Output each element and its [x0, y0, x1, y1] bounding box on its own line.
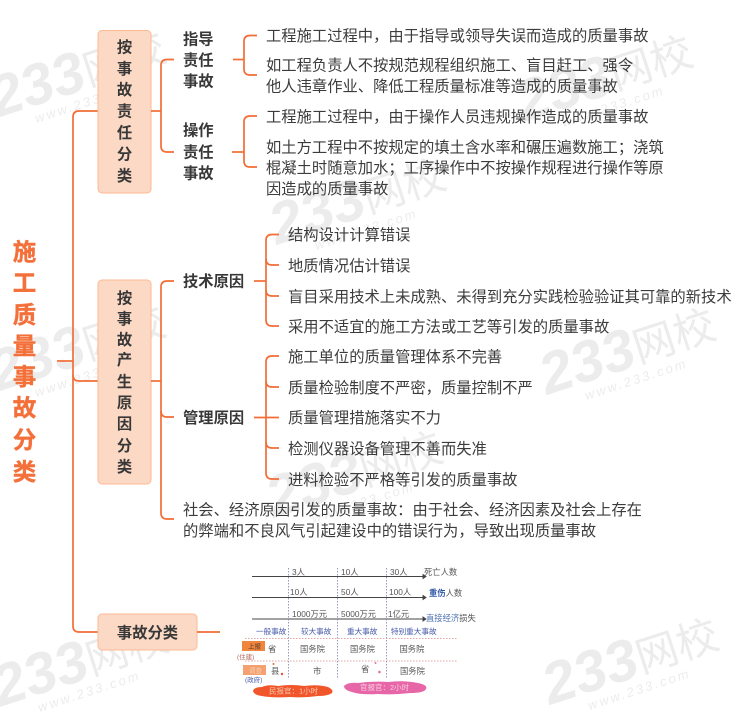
chart: accident grading table: (住建) — [237, 652, 254, 661]
threshold values: 1000万元 — [292, 609, 327, 619]
text block: technical causes — [288, 226, 732, 336]
connector: to chart — [197, 631, 220, 633]
text block: management causes: 检测仪器设备管理不善而失准 — [288, 441, 487, 458]
panel: 按事故责任分类: 按 — [117, 38, 132, 56]
panel: 按事故产生原因分类 — [98, 280, 151, 484]
title: 施工质量事故分类: 工 — [13, 270, 36, 296]
label: 指导责任事故: 事故 — [183, 72, 214, 90]
text block: social and economic causes: 社会、经济原因引发的质量事故：由于社会、经济因素及社会上存在 — [183, 502, 642, 519]
label: 操作责任事故: 事故 — [183, 164, 214, 182]
threshold values: 死亡人数 — [424, 567, 458, 577]
panel: 按事故产生原因分类: 故 — [117, 332, 132, 349]
cloud: 1 hour: 民报官：1小时 — [269, 686, 319, 696]
threshold values: 30人 — [390, 567, 408, 577]
panel: 按事故产生原因分类: 类 — [117, 459, 132, 476]
panel: 按事故产生原因分类: 产 — [117, 352, 132, 369]
chart: accident grading table: 上报 — [248, 642, 262, 650]
threshold values: 直接经济损失 — [426, 613, 477, 623]
panel: 事故分类: 事故分类 — [117, 624, 178, 642]
cloud: 2 hours: 官报官：2小时 — [360, 682, 410, 692]
connector: cause branches — [151, 234, 279, 519]
threshold values: 50人 — [341, 587, 359, 597]
text block: social and economic causes: 的弊端和不良风气引起建设中的错误行为，导致出现质量事故 — [183, 523, 596, 540]
threshold values: 重伤人数 — [429, 588, 463, 598]
title: 施工质量事故分类: 事 — [13, 364, 36, 390]
text block: responsibility details: 棍凝土时随意加水；工序操作中不按操作规程进行操作等原 — [266, 159, 664, 177]
panel: 按事故产生原因分类: 事 — [117, 310, 132, 328]
threshold values: 10人 — [290, 587, 308, 597]
chart: accident grading table: 国务院 — [400, 644, 425, 654]
panel: 按事故责任分类: 类 — [117, 168, 132, 185]
title: 施工质量事故分类: 分 — [13, 427, 36, 453]
text block: responsibility details: 因造成的质量事故 — [266, 181, 388, 198]
label: 操作责任事故: 操作 — [183, 122, 214, 140]
text block: technical causes: 结构设计计算错误 — [288, 226, 410, 244]
panel: 按事故责任分类: 事 — [117, 60, 132, 78]
chart: accident grading table: 国务院 — [400, 666, 426, 676]
threshold values: 10人 — [341, 567, 359, 577]
text block: responsibility details: 工程施工过程中，由于操作人员违规操作造成的质量事故 — [266, 109, 648, 126]
threshold values: 1亿元 — [388, 609, 409, 619]
chart: accident grading table: 国务院 — [300, 644, 326, 654]
text block: responsibility details: 如工程负责人不按规范规程组织施工、盲目赶工、强令 — [266, 58, 633, 74]
label: 管理原因: 管理原因 — [183, 409, 244, 427]
text block: management causes: 质量检验制度不严密，质量控制不严 — [288, 380, 533, 397]
chart: accident grading table: 国务院 — [350, 644, 376, 654]
title: 施工质量事故分类: 量 — [13, 333, 36, 359]
chart: accident grading table: 调查 — [249, 666, 262, 674]
panel: 按事故产生原因分类: 原 — [117, 395, 132, 412]
panel: 按事故责任分类: 任 — [117, 125, 132, 142]
threshold values — [290, 567, 477, 623]
threshold values: 5000万元 — [341, 609, 376, 619]
text block: management causes: 进料检验不严格等引发的质量事故 — [288, 471, 517, 489]
label: 操作责任事故: 责任 — [183, 144, 214, 162]
connector: responsibility branches — [151, 36, 257, 167]
grade names: 重大事故 — [347, 626, 378, 636]
text block: management causes: 施工单位的质量管理体系不完善 — [288, 349, 502, 366]
title: 施工质量事故分类: 质 — [13, 302, 36, 328]
panel: 按事故产生原因分类: 分 — [117, 438, 132, 455]
cloud: 1 hour — [253, 685, 332, 697]
threshold values: 3人 — [292, 567, 305, 577]
trunk connector lines — [57, 111, 98, 632]
report and investigate rows — [242, 641, 265, 651]
panel: 按事故责任分类: 故 — [117, 82, 132, 99]
text block: responsibility details: 他人违章作业、降低工程质量标准等造成的质量事故 — [266, 78, 618, 96]
panel: 按事故产生原因分类: 因 — [117, 416, 132, 433]
panel: 按事故产生原因分类: 生 — [117, 374, 132, 391]
grade names: 较大事故 — [301, 626, 332, 636]
text block: social and economic causes — [183, 502, 642, 540]
panel: 按事故责任分类: 责 — [117, 104, 132, 120]
grade dividers — [288, 568, 386, 678]
label: 操作责任事故 — [183, 122, 214, 182]
grade names: 一般事故 — [256, 626, 287, 636]
grade names: 特别重大事故 — [391, 626, 437, 636]
text block: management causes: 质量管理措施落实不力 — [288, 410, 441, 427]
title: 施工质量事故分类: 施 — [13, 239, 36, 265]
chart: accident grading table: 省 — [361, 664, 369, 674]
text block: technical causes: 地质情况估计错误 — [288, 258, 410, 275]
marker dots — [272, 662, 381, 675]
label: 指导责任事故: 指导 — [183, 30, 214, 48]
panel: 按事故产生原因分类: 按 — [117, 290, 132, 308]
title: 施工质量事故分类 — [13, 239, 37, 485]
panel: 按事故责任分类: 分 — [117, 146, 132, 164]
thresholds axes — [252, 574, 426, 621]
grade names — [256, 626, 437, 636]
chart: accident grading table: 县 — [271, 666, 279, 676]
text block: responsibility details: 工程施工过程中，由于指导或领导失误而造成的质量事故 — [266, 28, 648, 45]
text block: technical causes: 采用不适宜的施工方法或工艺等引发的质量事故 — [288, 318, 609, 336]
text block: technical causes: 盲目采用技术上未成熟、未得到充分实践检验验证其可靠的新技术 — [288, 289, 732, 306]
panel: 事故分类 — [98, 614, 197, 650]
label: 指导责任事故 — [183, 30, 214, 90]
title: 施工质量事故分类: 类 — [13, 459, 36, 485]
chart: accident grading table: 市 — [313, 666, 321, 676]
text block: responsibility details: 如土方工程中不按规定的填土含水率和碾压遍数施工；浇筑 — [266, 138, 664, 156]
title: 施工质量事故分类: 故 — [13, 395, 37, 421]
threshold values: 100人 — [389, 587, 411, 597]
cloud: 2 hours — [344, 681, 426, 694]
text block: responsibility details — [266, 28, 664, 198]
chart: accident grading table — [237, 567, 477, 697]
text block: management causes — [288, 349, 533, 489]
label: 技术原因: 技术原因 — [183, 272, 244, 290]
label: 指导责任事故: 责任 — [183, 52, 214, 70]
chart: accident grading table: 省 — [268, 644, 276, 654]
panel: 按事故责任分类 — [98, 30, 151, 193]
chart: accident grading table: (政府) — [245, 675, 262, 684]
